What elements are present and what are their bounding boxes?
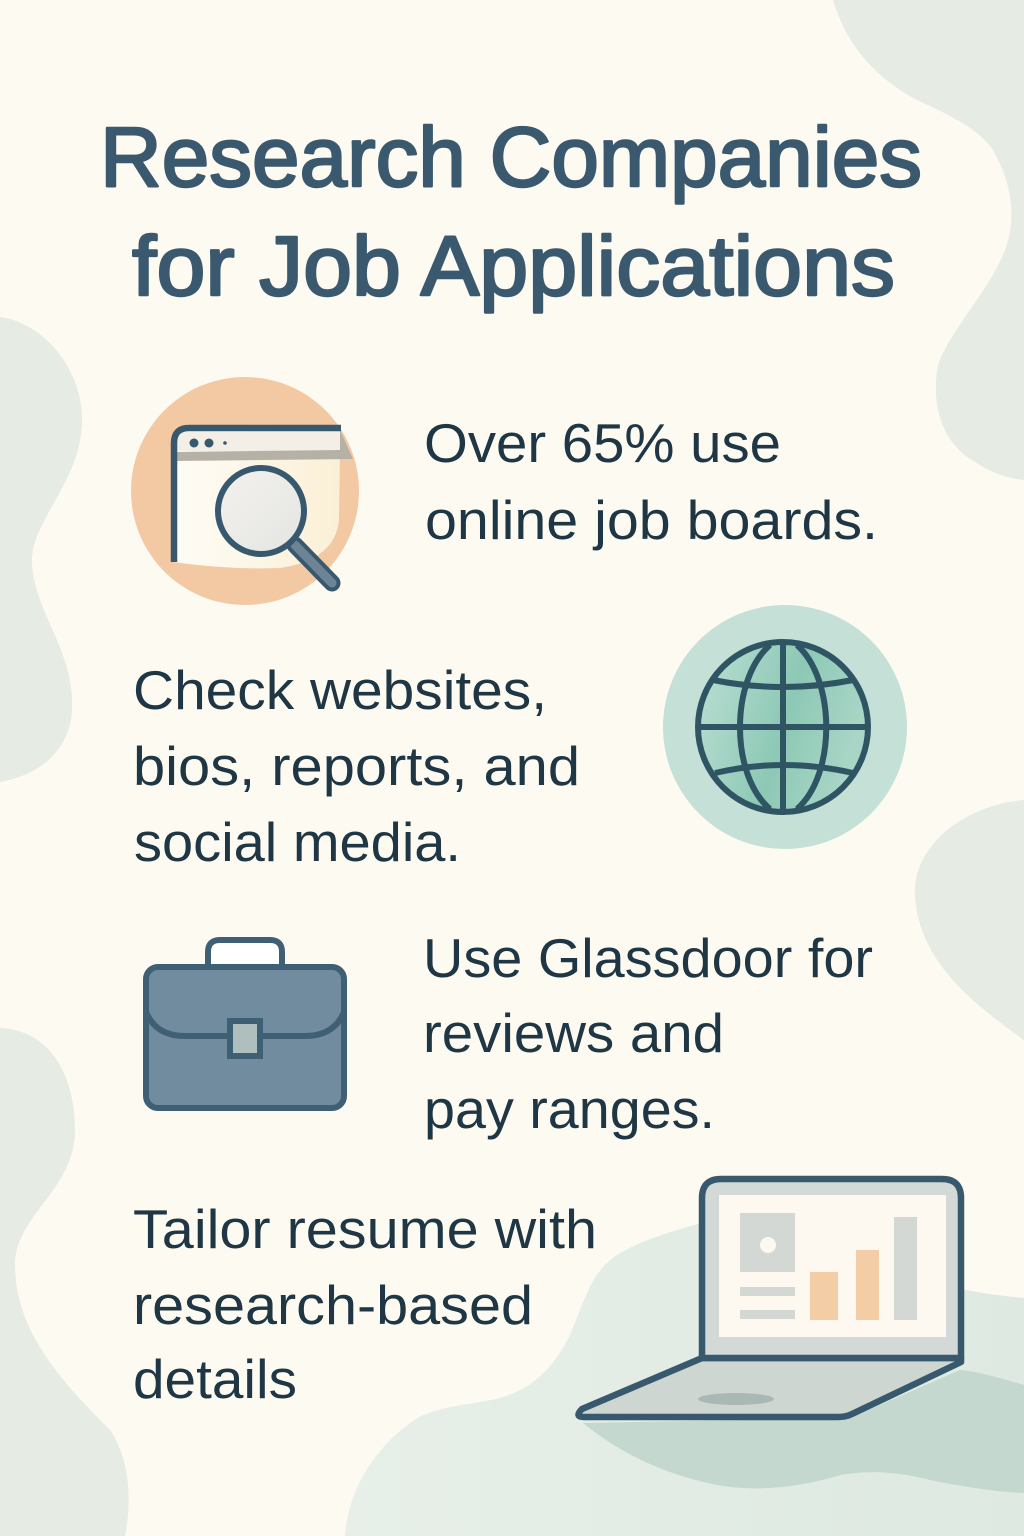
title: Research Companies xyxy=(100,110,922,204)
text: Glassdoor: reviews and xyxy=(423,1002,724,1064)
text: Glassdoor: pay ranges. xyxy=(424,1078,715,1140)
text: job boards xyxy=(424,412,878,551)
title xyxy=(100,110,922,313)
text: tailor resume: research-based xyxy=(133,1274,533,1336)
text: Glassdoor xyxy=(423,927,873,1140)
text: tailor resume: Tailor resume with xyxy=(133,1198,597,1260)
text: websites: Check websites, xyxy=(133,659,547,721)
icon: globe xyxy=(663,605,907,849)
icon: browser window with magnifying glass xyxy=(131,377,359,605)
title: for Job Applications xyxy=(132,219,895,313)
text: Glassdoor: Use Glassdoor for xyxy=(423,927,873,989)
text: tailor resume xyxy=(133,1198,597,1410)
text: websites: bios, reports, and xyxy=(133,735,580,797)
icon: laptop xyxy=(578,1179,961,1417)
text: job boards: Over 65% use xyxy=(424,412,781,474)
text: job boards: online job boards. xyxy=(425,489,878,551)
text: websites xyxy=(133,659,580,873)
icon: briefcase xyxy=(146,940,344,1108)
text: tailor resume: details xyxy=(133,1348,297,1410)
text: websites: social media. xyxy=(134,811,461,873)
